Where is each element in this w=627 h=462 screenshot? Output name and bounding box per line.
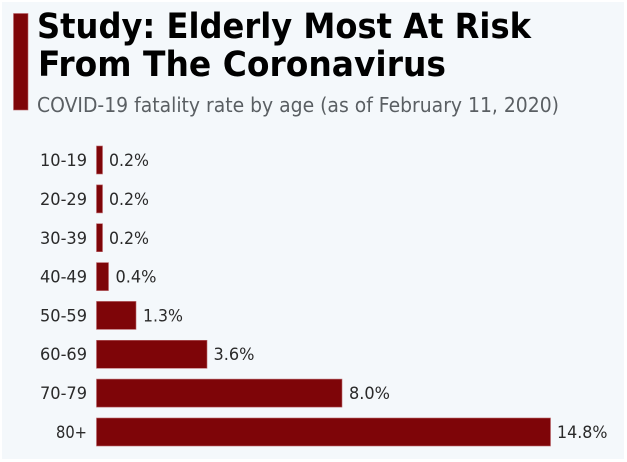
row: 30-39: 0.2% (109, 229, 149, 249)
row: 10-19: 0.2% (109, 151, 149, 171)
row: 70-79: 70-79 (40, 384, 87, 404)
row: 10-19 (40, 146, 149, 174)
row: 80+: 14.8% (557, 423, 608, 443)
row: 10-19: 10-19 (40, 151, 87, 171)
title (37, 7, 532, 85)
row: 20-29 (40, 185, 149, 213)
subtitle: COVID-19 fatality rate by age (as of February 11, 2020) (37, 93, 559, 117)
row: 80+ (56, 418, 608, 446)
bar chart (40, 146, 608, 446)
title: From The Coronavirus (38, 45, 446, 85)
row: 30-39: 30-39 (40, 229, 87, 249)
row: 40-49: 40-49 (40, 268, 87, 288)
row: 60-69: 3.6% (214, 345, 254, 365)
row: 20-29: 0.2% (109, 190, 149, 210)
row: 40-49: 0.4% (116, 268, 156, 288)
row: 60-69 (40, 340, 254, 368)
row: 80+: 80+ (56, 423, 87, 443)
row: 30-39 (40, 224, 149, 252)
accent bar (14, 14, 28, 110)
row: 20-29: 20-29 (40, 190, 87, 210)
row: 40-49 (40, 263, 156, 291)
row: 50-59: 1.3% (143, 306, 183, 326)
row: 50-59 (40, 301, 183, 329)
row: 60-69: 60-69 (40, 345, 87, 365)
row: 70-79 (40, 379, 390, 407)
row: 50-59: 50-59 (40, 306, 87, 326)
row: 70-79: 8.0% (349, 384, 390, 404)
title: Study: Elderly Most At Risk (37, 7, 532, 47)
